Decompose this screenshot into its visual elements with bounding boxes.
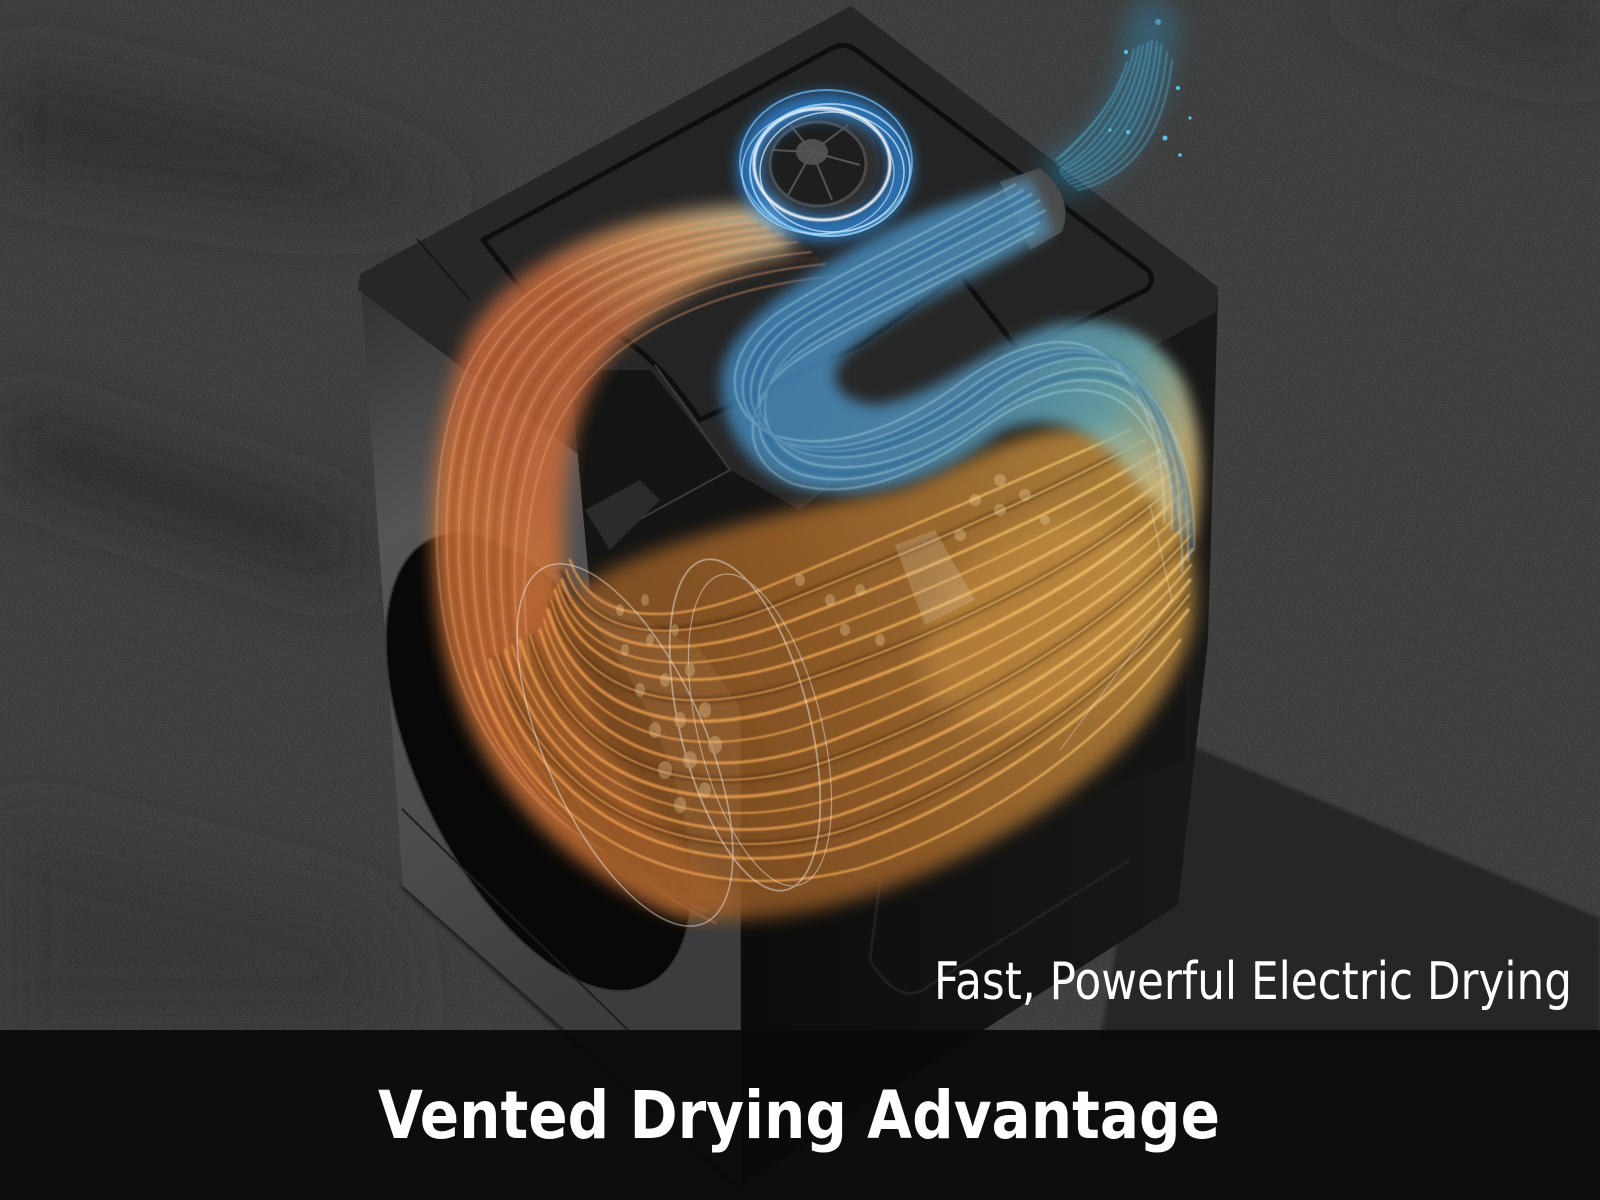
warm glow on the right of the drum [882,472,1198,768]
rear hatch outline [870,860,1130,993]
vent plume [1056,19,1192,190]
floor shadow of the dryer [1100,745,1600,1040]
airflow: red-orange hot air band [434,205,836,923]
recessed top tray outline [483,45,1152,420]
airflow: blue cooling S-curve [721,178,1201,572]
control panel outline [620,365,730,530]
base plinth line [402,809,628,1030]
caption bar [0,1030,1600,1200]
dryer body [322,6,1218,1190]
contact shadow [403,886,741,1190]
fan housing [756,108,880,220]
airflow: blue fan ring [740,90,912,236]
drum: see-through wireframe and perforations [473,474,1172,956]
dryer right side panel [740,295,1218,1186]
title: Vented Drying Advantage [378,1077,1220,1154]
dryer front panel [360,274,741,1186]
dark interior window [570,330,1190,880]
lid seam [417,239,470,300]
exhaust cylinder [1000,168,1066,250]
electronics cluster [585,480,660,550]
dryer top panel [358,6,1218,575]
airflow: lower orange drum swirl [475,426,1198,919]
bright strands [475,430,1192,881]
door opening [322,486,756,1038]
dark streaks between strands [497,440,1191,844]
